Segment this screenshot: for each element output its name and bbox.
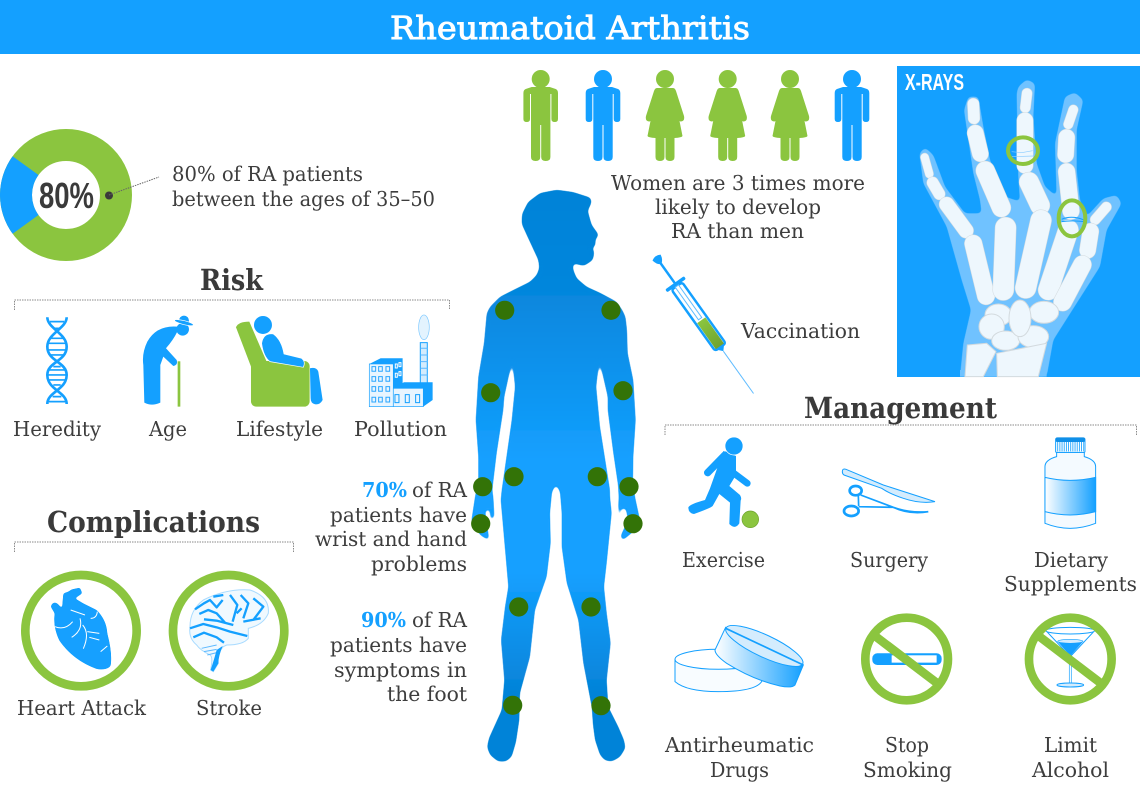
text: women statistic [611,171,865,243]
risk labels: Lifestyle [236,417,323,441]
icon: factory pollution [369,315,433,407]
icon: supplement bottle [1045,437,1096,528]
text: wrist and hand statistic: problems [371,552,467,576]
risk labels: Heredity [13,417,101,441]
management labels [664,548,1137,782]
complications labels [17,696,262,720]
text: age statistic: between the ages of 35–50 [172,187,435,211]
icon: heart in ring [25,575,137,686]
text: foot statistic: patients have [330,633,467,657]
icon: DNA heredity [47,317,67,404]
text: age statistic [172,162,435,211]
text: wrist and hand statistic: wrist and hand [315,527,467,551]
donut chart: 80% age share: 80% [39,175,94,216]
heading: Complications: Complications [47,505,260,539]
human body silhouette with joint markers [471,190,643,761]
management labels: Stop [885,733,929,757]
complications labels: Heart Attack [17,696,147,720]
donut chart: 80% age share [0,145,159,245]
text: women statistic: RA than men [671,219,804,243]
text: foot statistic: the foot [387,682,468,706]
management labels: Exercise [682,548,765,572]
heading: Management: Management [804,391,998,425]
risk labels [13,417,447,441]
text: foot statistic [330,608,468,706]
panel: x-ray of hand [897,66,1140,377]
management labels: Antirheumatic [664,733,814,757]
icon: exercise [688,437,759,528]
text: wrist and hand statistic: 70% [362,478,407,502]
management labels: Surgery [850,548,928,572]
green joint highlight rings [1008,137,1085,236]
icon: antirheumatic tablets [675,618,807,692]
x-ray heading: X-RAYS [905,69,964,95]
text: foot statistic: 90% [361,608,406,632]
text: foot statistic: of RA [412,608,467,632]
management labels: Smoking [863,758,952,782]
text: wrist and hand statistic: patients have [330,503,467,527]
icon: brain in ring [173,575,284,686]
text: age statistic: 80% of RA patients [172,162,363,186]
risk labels: Age [148,417,187,441]
hand bones [919,79,1122,377]
icon: scalpel and forceps [842,469,935,516]
icon: no smoking [865,618,948,700]
heading: Risk: Risk [200,263,264,297]
text: women statistic: Women are 3 times more [611,171,865,195]
complications labels: Stroke [196,696,262,720]
management labels: Supplements [1004,572,1137,596]
pictogram row: men and women [523,70,869,161]
management labels: Dietary [1034,548,1108,572]
management labels: Drugs [710,758,769,782]
title banner [0,0,1140,54]
text: wrist and hand statistic [315,478,467,576]
title banner: Rheumatoid Arthritis [390,9,750,47]
risk labels: Pollution [354,417,447,441]
text: wrist and hand statistic: of RA [412,478,467,502]
text: women statistic: likely to develop [655,195,821,219]
icon: syringe [646,250,763,400]
management labels: Alcohol [1031,758,1109,782]
label: Vaccination: Vaccination [740,319,860,343]
management labels: Limit [1044,733,1098,757]
text: foot statistic: symptoms in [334,658,467,682]
icon: elderly person with cane [143,316,194,407]
icon: person in armchair [236,316,323,407]
icon: limit alcohol [1029,618,1112,700]
